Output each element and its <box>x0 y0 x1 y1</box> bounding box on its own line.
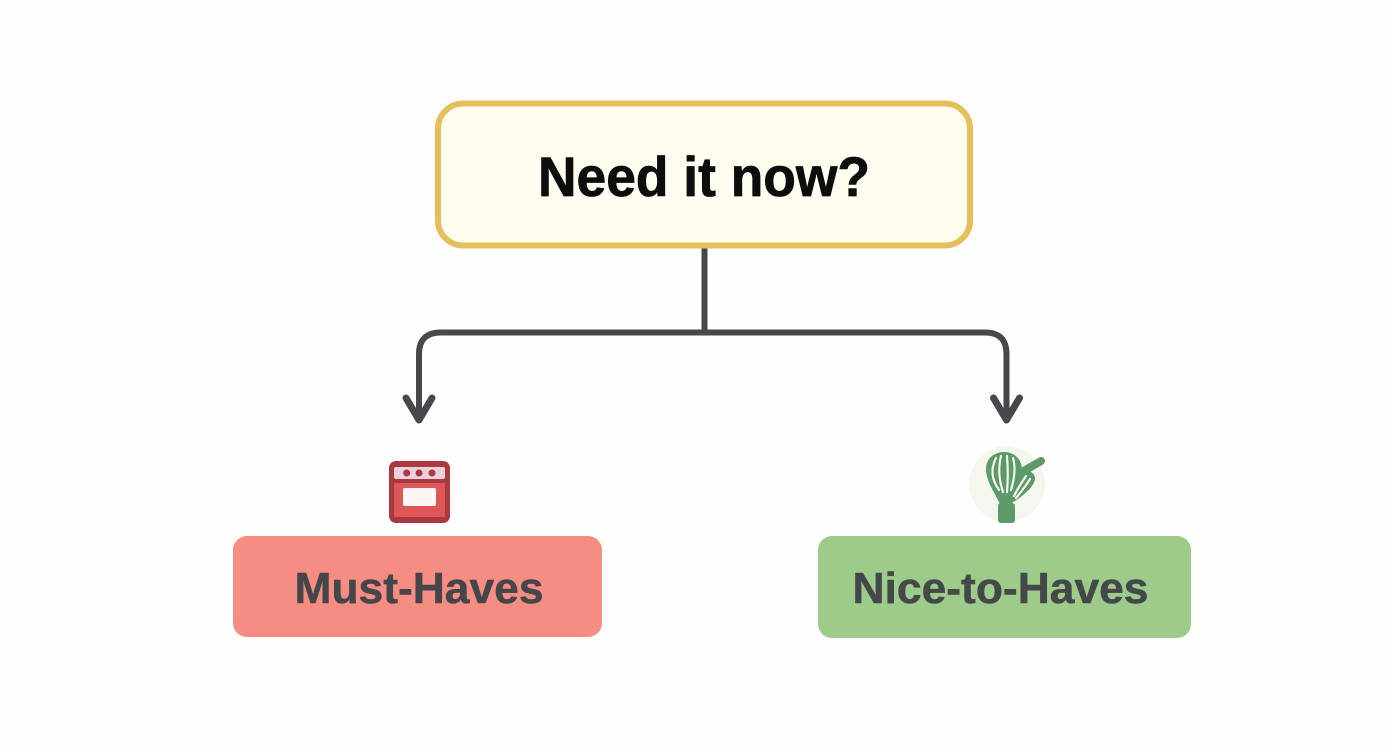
label: must-haves: Must-Haves <box>294 564 544 613</box>
panel: must-haves <box>233 536 602 637</box>
icon: whisk <box>969 446 1045 523</box>
question box <box>438 104 970 246</box>
connector: branching arrows <box>406 248 1020 420</box>
label: nice-to-haves: Nice-to-Haves <box>852 564 1148 613</box>
panel: nice-to-haves <box>818 536 1191 638</box>
question text: Need it now? <box>538 145 870 208</box>
icon: oven <box>389 461 450 523</box>
